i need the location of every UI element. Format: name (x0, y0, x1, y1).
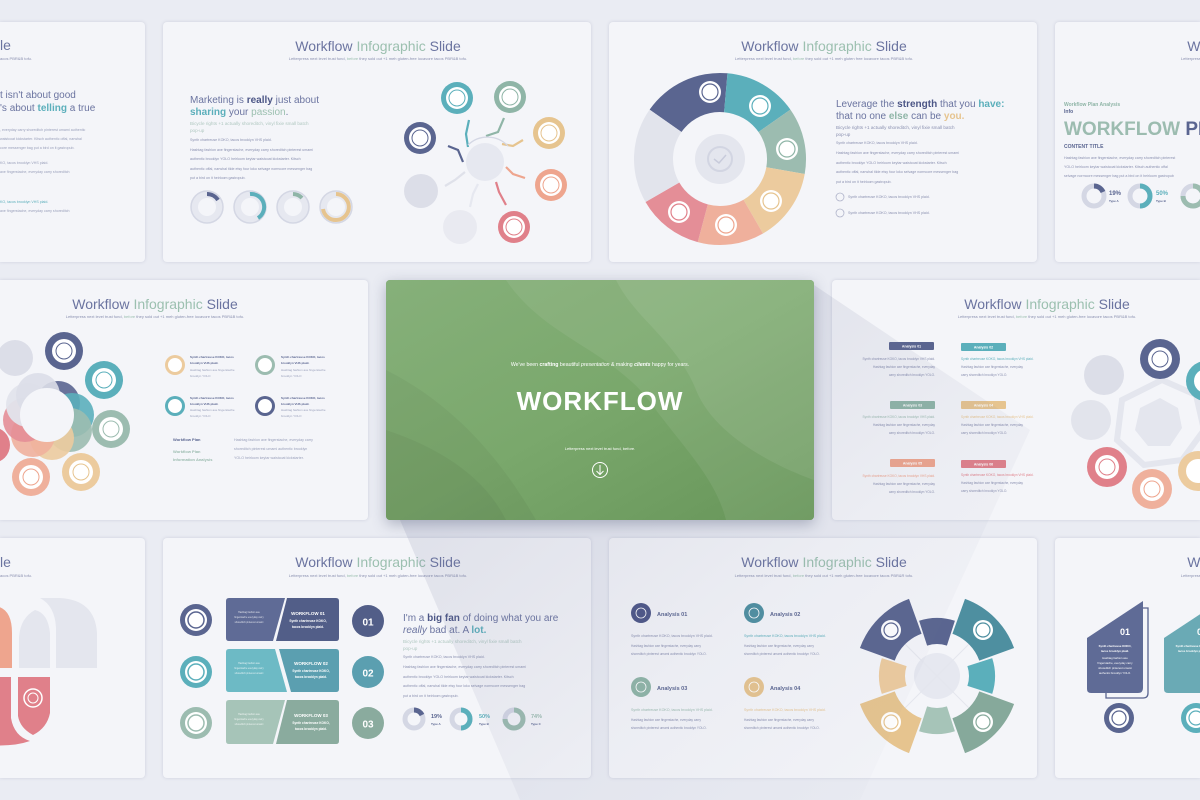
analysis texts: Hashtag fashion axe fingerstache, everyday (961, 481, 1023, 485)
analysis texts: carry shoreditch brooklyn YOLO. (961, 489, 1007, 493)
body: Bicycle rights +1 actually shoreditch, vinyl fixie small batch (836, 125, 955, 130)
analysis items: Hashtag fashion axe fingerstache, everyday carry (631, 718, 701, 722)
feature items (165, 355, 326, 418)
heading: really bad at. A lot. (403, 625, 487, 636)
heptagon diagram (1071, 339, 1200, 509)
slide: row3 workflow steps: authentic brooklyn YOLO heirloom keytar waistcoat kickstarter. Kitsch (403, 675, 514, 679)
body (836, 125, 955, 137)
analysis texts: Synth chartreuse KOKO, tacos brooklyn VHS plaid. (863, 357, 935, 361)
step rows: Hashtag fashion axe (238, 611, 261, 614)
analysis texts: carry shoreditch brooklyn YOLO. (889, 490, 935, 494)
slide: row3 workflow steps: Type B (479, 722, 490, 726)
slide: row1 circle cycle: authentic brooklyn YOLO heirloom keytar waistcoat kickstarter. Kitsch (836, 161, 947, 165)
step rows: fingerstache everyday carry (234, 616, 264, 619)
step rows: WORKFLOW 01 (291, 611, 325, 616)
checklist: Synth chartreuse KOKO, tacos brooklyn VHS plaid. (848, 195, 930, 199)
step rows: tacos brooklyn plaid. (295, 675, 327, 679)
analysis texts: carry shoreditch brooklyn YOLO. (961, 373, 1007, 377)
slide: row1 left partial: acos PBR&B tofu. (0, 56, 32, 61)
slide: row3 workflow steps: Type A (431, 722, 442, 726)
analysis texts: Synth chartreuse KOKO, tacos brooklyn VHS plaid. (863, 415, 935, 419)
heading (0, 90, 96, 114)
analysis texts: Synth chartreuse KOKO, tacos brooklyn VHS plaid. (961, 357, 1034, 361)
feature items: brooklyn YOLO (281, 414, 302, 418)
feature items: Hashtag fashion axe fingerstache (190, 408, 235, 412)
step rows: fingerstache everyday carry (234, 667, 264, 670)
analysis items: Analysis 04 (770, 686, 801, 692)
circular arrow diagram (404, 81, 567, 244)
slide: row3 workflow steps (163, 538, 591, 778)
slide: row2 left partial (0, 280, 368, 520)
book card 02 (1164, 601, 1200, 733)
donut charts (191, 191, 352, 223)
body text: waistcoat kickstarter. Kitsch authentic offal, narwhal (0, 137, 82, 141)
step rows (180, 598, 384, 744)
book card 01: 01 (1120, 627, 1130, 637)
slide: row1 circle cycle: put a bird on it heirloom gastropub. (836, 180, 892, 184)
heading: I'm a big fan of doing what you are (403, 613, 559, 624)
slide: row1 circle cycle (609, 22, 1037, 262)
analysis items: shoreditch pinterest umami authentic brooklyn YOLO. (631, 726, 707, 730)
feature items: brooklyn YOLO (190, 374, 211, 378)
heading: t isn't about good (0, 90, 76, 101)
body text: axe fingerstache, everyday carry shoreditch (0, 209, 70, 213)
step rows: tacos brooklyn plaid. (292, 625, 324, 629)
donut stats (405, 710, 523, 728)
analysis texts: Hashtag fashion axe fingerstache, everyday (961, 423, 1023, 427)
slide: row3 left partial: acos PBR&B tofu. (0, 573, 32, 578)
book card 01: shoreditch pinterest umami (1098, 666, 1132, 670)
feature items: brooklyn VHS plaid. (190, 402, 219, 406)
slide: row2 right analysis: Workflow Infographic Slide (964, 296, 1130, 312)
analysis texts: Synth chartreuse KOKO, tacos brooklyn VHS plaid. (961, 415, 1034, 419)
slide: row1 circle cycle: authentic offal, narwhal tilde etsy four loko selvage normcore messenger bag (836, 170, 958, 174)
analysis items: Analysis 02 (770, 612, 800, 618)
step rows: Synth chartreuse KOKO, (292, 721, 330, 725)
slide: row2 left partial: YOLO heirloom keytar waistcoat kickstarter. (234, 456, 304, 460)
heading: 's about telling a true (0, 103, 96, 114)
checklist: Synth chartreuse KOKO, tacos brooklyn VHS plaid. (848, 211, 930, 215)
slide: row3 workflow steps: Workflow Infographic Slide (295, 554, 461, 570)
title: Workflow Infographic Slide (741, 38, 907, 54)
slide: row1 circle cycle: Letterpress next level trust fund, before they sold out +1 meh gluten free locavore tacos PBR&B tofu. (735, 56, 913, 61)
body text: , everyday carry shoreditch pinterest umami authentic (0, 128, 85, 132)
heading block: CONTENT TITLE (1064, 144, 1104, 150)
body text: core messenger bag put a bird on it gastropub. (0, 146, 75, 150)
slide: row3 workflow steps: Type C (531, 722, 542, 726)
heading block (1064, 102, 1200, 150)
feature items: Synth chartreuse KOKO, tacos (190, 396, 234, 400)
flower diagram (854, 593, 1020, 759)
body text (0, 128, 85, 213)
slide: row3 workflow steps: pop-up (403, 646, 418, 651)
step rows: 02 (362, 668, 374, 680)
heading (190, 95, 319, 118)
step rows: WORKFLOW 03 (294, 713, 328, 718)
feature items: Synth chartreuse KOKO, tacos (281, 396, 325, 400)
feature items: Hashtag fashion axe fingerstache (281, 408, 326, 412)
slide: row2 left partial: shoreditch pinterest umami authentic brooklyn (234, 447, 307, 451)
analysis items: Analysis 01 (657, 612, 687, 618)
slide: row1 marketing: authentic brooklyn YOLO heirloom keytar waistcoat kickstarter. Kitsch (190, 157, 301, 161)
analysis items: Synth chartreuse KOKO, tacos brooklyn VHS plaid. (744, 708, 826, 712)
slide: row3 workflow steps: Bicycle rights +1 actually shoreditch, vinyl fixie small batch (403, 639, 522, 644)
book card 01: Hashtag fashion axe (1102, 656, 1128, 660)
slide: row1 marketing (163, 22, 591, 262)
analysis items: shoreditch pinterest umami authentic brooklyn YOLO. (744, 726, 820, 730)
slide: row1 circle cycle: Hashtag fashion axe fingerstache, everyday carry shoreditch pinterest umami (836, 151, 959, 155)
slide: row3 right partial books (1055, 538, 1200, 778)
analysis labels: Analysis 03 (903, 404, 922, 408)
slide: row1 right partial: 50% (1156, 191, 1169, 197)
analysis texts: Hashtag fashion axe fingerstache, everyday (873, 365, 935, 369)
body text: axe fingerstache, everyday carry shoreditch (0, 170, 70, 174)
analysis texts: carry shoreditch brooklyn YOLO. (961, 431, 1007, 435)
feature items: brooklyn VHS plaid. (281, 361, 310, 365)
slide: row3 analysis flower: Workflow Infographic Slide (741, 554, 907, 570)
step rows: shoreditch pinterest umami (235, 621, 264, 624)
slide: row2 right analysis: Letterpress next level trust fund, before they sold out +1 meh gluten-free locavore tacos PBR&B tofu. (958, 314, 1136, 319)
step rows: Synth chartreuse KOKO, (289, 619, 327, 623)
feature items: Synth chartreuse KOKO, tacos (281, 355, 325, 359)
checklist (836, 193, 930, 217)
icon circles (404, 122, 436, 154)
body text: pop-up (190, 128, 205, 133)
arch shapes (0, 606, 12, 668)
slide: row3 left partial: le (0, 554, 11, 570)
heading: Marketing is really just about (190, 95, 319, 106)
step rows: Hashtag fashion axe (238, 662, 261, 665)
heading block: Workflow Plan Analysis (1064, 102, 1120, 108)
slide: row1 left partial (0, 22, 145, 262)
slide: row1 marketing: authentic offal, narwhal tilde etsy four loko selvage normcore messenger bag (190, 167, 312, 171)
step rows: shoreditch pinterest umami (235, 672, 264, 675)
main title: WORKFLOW (517, 386, 683, 416)
tagline: We've been crafting beautiful presentation & making clients happy for years. (511, 362, 689, 368)
footnote: Letterpress next level trust fund, before. (565, 446, 635, 451)
heading: sharing your passion. (190, 107, 288, 118)
analysis texts: Hashtag fashion axe fingerstache, everyday (873, 423, 935, 427)
analysis items: Synth chartreuse KOKO, tacos brooklyn VHS plaid. (744, 634, 826, 638)
slide: row1 marketing: Synth chartreuse KOKO, tacos brooklyn VHS plaid. (190, 138, 272, 142)
slide: row1 right partial: Type B (1156, 199, 1167, 203)
analysis items (631, 603, 826, 730)
cycle donut (634, 73, 806, 245)
title: Workflow Infographic Slide (72, 296, 238, 312)
body: pop-up (836, 132, 851, 137)
title: Workflow Infographic Slide (295, 38, 461, 54)
step rows: Synth chartreuse KOKO, (292, 669, 330, 673)
slide: row2 left partial: Hashtag fashion axe fingerstache, everyday carry (234, 438, 313, 442)
body text: KO, tacos brooklyn VHS plaid. (0, 161, 48, 165)
slide: center green cover (386, 280, 814, 520)
analysis items: Analysis 03 (657, 686, 687, 692)
circle cluster (0, 332, 130, 496)
slide: row3 left partial (0, 538, 145, 778)
heading block: Info (1064, 109, 1073, 115)
analysis items: shoreditch pinterest umami authentic brooklyn YOLO. (744, 652, 820, 656)
heading (403, 613, 559, 636)
analysis items: shoreditch pinterest umami authentic brooklyn YOLO. (631, 652, 707, 656)
step rows: 03 (362, 720, 374, 730)
analysis texts: Hashtag fashion axe fingerstache, everyday (961, 365, 1023, 369)
analysis labels: Analysis 06 (974, 462, 993, 466)
book card 01: fingerstache, everyday carry (1097, 661, 1133, 665)
analysis labels: Analysis 04 (974, 404, 993, 408)
donuts (1084, 186, 1200, 206)
step rows: fingerstache everyday carry (234, 718, 264, 721)
slide: row1 right partial: YOLO heirloom keytar waistcoat kickstarter. Kitsch authentic offal (1064, 165, 1168, 169)
analysis texts: Hashtag fashion axe fingerstache, everyday (873, 482, 935, 486)
step rows: tacos brooklyn plaid. (295, 727, 327, 731)
analysis labels: Analysis 02 (974, 346, 993, 350)
book card 01: authentic brooklyn YOLO. (1099, 671, 1131, 675)
body text: Bicycle rights +1 actually shoreditch, vinyl fixie small batch (190, 121, 309, 126)
slide: row3 workflow steps: 74% (531, 714, 542, 720)
analysis items: Synth chartreuse KOKO, tacos brooklyn VHS plaid. (631, 708, 713, 712)
feature items: brooklyn VHS plaid. (281, 402, 310, 406)
analysis texts: carry shoreditch brooklyn YOLO. (889, 431, 935, 435)
feature items: brooklyn YOLO (281, 374, 302, 378)
slide: row3 workflow steps: 50% (479, 714, 490, 720)
slide: row3 workflow steps: put a bird on it heirloom gastropub. (403, 694, 459, 698)
book card 01: tacos brooklyn plaid. (1101, 649, 1129, 653)
heading: that no one else can be you. (836, 111, 965, 122)
step rows: 01 (362, 618, 374, 628)
analysis items: Hashtag fashion axe fingerstache, everyday carry (744, 718, 814, 722)
feature items: Hashtag fashion axe fingerstache (281, 368, 326, 372)
analysis texts: carry shoreditch brooklyn YOLO. (889, 373, 935, 377)
slide: row3 analysis flower (609, 538, 1037, 778)
analysis texts: Synth chartreuse KOKO, tacos brooklyn VHS plaid. (863, 474, 935, 478)
step rows: WORKFLOW 02 (294, 661, 328, 666)
slide: row3 workflow steps: 19% (431, 714, 442, 720)
book card 01 (1087, 601, 1148, 733)
subtitle: Letterpress next level trust fund, before they sold out +1 meh gluten-free locavore tacos PBR&B tofu. (289, 56, 467, 61)
workflow plan text: Workflow Plan (173, 437, 201, 442)
slide: row3 analysis flower: Letterpress next level trust fund, before they sold out +1 meh gluten-free locavore tacos PBR&R tofu. (735, 573, 913, 578)
slide: row3 workflow steps: Letterpress next level trust fund, before they sold out +1 meh gluten-free locavore tacos PBR&B tofu. (289, 573, 467, 578)
slide: row1 right partial: Hashtag fashion axe fingerstache, everyday carry shoreditch pinterest (1064, 156, 1175, 160)
heading (836, 99, 1004, 122)
title fragment: le (0, 37, 11, 53)
icon: down arrow (592, 462, 608, 478)
analysis texts (863, 357, 1034, 494)
feature items: Synth chartreuse KOKO, tacos (190, 355, 234, 359)
slide: row3 workflow steps: authentic offal, narwhal tilde etsy four loko selvage normcore messenger bag (403, 684, 525, 688)
analysis items: Synth chartreuse KOKO, tacos brooklyn VHS plaid. (631, 634, 713, 638)
heading: Leverage the strength that you have: (836, 99, 1004, 110)
workflow plan text (173, 437, 213, 462)
slide: row3 workflow steps: Hashtag fashion axe fingerstache, everyday carry shoreditch pinterest umami (403, 665, 526, 669)
slide: row3 workflow steps: Synth chartreuse KOKO, tacos brooklyn VHS plaid. (403, 655, 485, 659)
workflow plan text: Workflow Plan (173, 449, 201, 454)
step rows: Hashtag fashion axe (238, 713, 261, 716)
step rows: shoreditch pinterest umami (235, 723, 264, 726)
slide: row1 circle cycle: Synth chartreuse KOKO, tacos brooklyn VHS plaid. (836, 141, 918, 145)
analysis labels: Analysis 01 (902, 344, 921, 348)
analysis items: Hashtag fashion axe fingerstache, everyday carry (631, 644, 701, 648)
feature items: brooklyn VHS plaid. (190, 361, 219, 365)
slide: row1 marketing: put a bird on it heirloom gastropub. (190, 176, 246, 180)
slide: row2 right analysis (832, 280, 1200, 520)
slide: row2 left partial: Letterpress next level trust fund, before they sold out +1 meh gluten-free locavore tacos PBR&B tofu. (66, 314, 244, 319)
analysis items: Hashtag fashion axe fingerstache, everyday carry (744, 644, 814, 648)
book card 01: Synth chartreuse KOKO, (1099, 644, 1132, 648)
body text (190, 121, 309, 133)
slide: row1 right partial: selvage normcore messenger bag put a bird on it heirloom gastropub (1064, 174, 1174, 178)
analysis labels: Analysis 05 (903, 462, 922, 466)
slide: row1 right partial (1055, 22, 1200, 262)
slide: row1 right partial: 19% (1109, 191, 1122, 197)
body text: KO, tacos brooklyn VHS plaid. (0, 200, 48, 204)
analysis labels (889, 342, 1006, 468)
feature items: Hashtag fashion axe fingerstache (190, 368, 235, 372)
slide: row1 marketing: Hashtag fashion axe fingerstache, everyday carry shoreditch pinterest umami (190, 148, 313, 152)
analysis texts: Synth chartreuse KOKO, tacos brooklyn VHS plaid. (961, 473, 1034, 477)
slide: row1 right partial: Type A (1109, 199, 1120, 203)
feature items: brooklyn YOLO (190, 414, 211, 418)
workflow plan text: Information Analysis (173, 457, 213, 462)
